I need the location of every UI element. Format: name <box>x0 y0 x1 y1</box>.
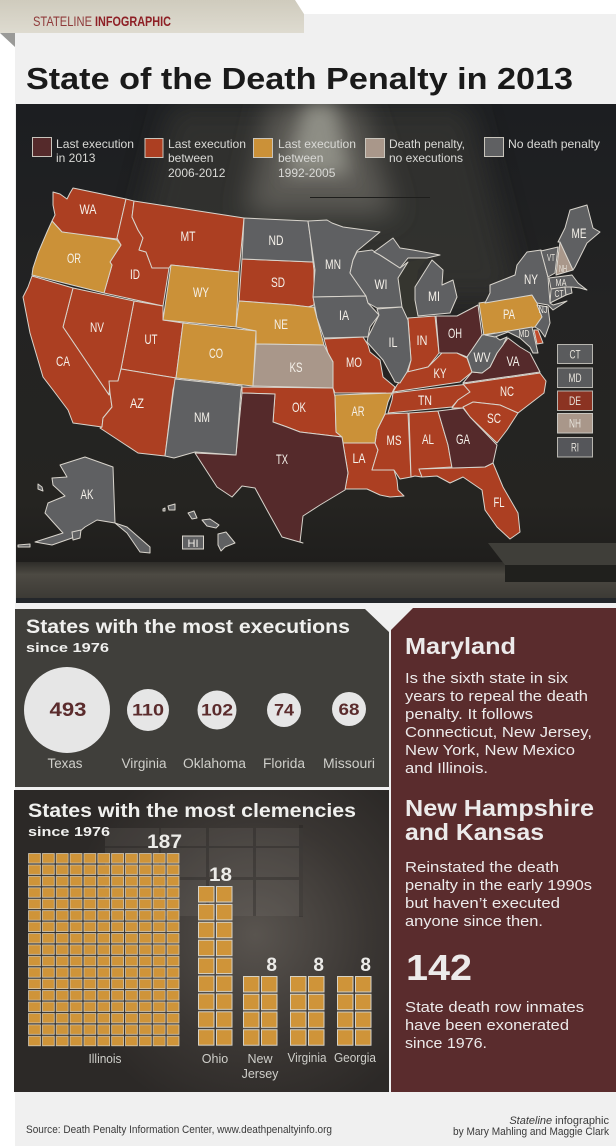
circle: Missouri 68: 68 <box>338 700 360 719</box>
text block: New Hampshire and Kansas: penalty in the early 1990s <box>405 877 592 894</box>
bar: Georgia 8 <box>334 955 376 1065</box>
heading: most clemencies: States with the most clemencies <box>28 801 356 822</box>
bar: Illinois 187: 187 <box>147 832 182 853</box>
credit <box>453 1115 609 1138</box>
label: Hawaii box: HI <box>188 538 198 550</box>
circle: Missouri 68 <box>323 692 375 771</box>
states: last execution between 2006-2012 <box>23 188 546 539</box>
legend: last execution between 1992-2005: Last execution <box>278 137 356 151</box>
circle: Florida 74 <box>263 693 305 771</box>
heading: most executions <box>26 617 350 655</box>
circle: Virginia 110 <box>122 689 169 771</box>
state abbreviations: NM <box>194 409 210 425</box>
panel: states with the most clemencies <box>14 790 389 1092</box>
key: MD: MD <box>568 373 582 385</box>
legend: no death penalty: No death penalty <box>508 137 600 151</box>
text block: Maryland <box>405 633 592 777</box>
state abbreviations: AL <box>422 431 434 447</box>
banner: Stateline Infographic: STATELINE <box>33 13 92 29</box>
text block: Maryland: New York, New Mexico <box>405 742 575 759</box>
state abbreviations: IN <box>416 332 428 348</box>
source note: Source: Death Penalty Information Center, www.deathpenaltyinfo.org <box>26 1124 332 1136</box>
bar: Ohio 18 <box>198 865 233 1066</box>
state abbreviations: ND <box>268 232 284 248</box>
state abbreviations: OR <box>67 250 81 266</box>
state abbreviations: NY <box>524 271 538 287</box>
legend: last execution between 2006-2012: between <box>168 151 213 165</box>
state abbreviations: WV <box>474 349 491 365</box>
credit: Stateline infographic <box>509 1115 609 1127</box>
text block: Maryland: and Illinois. <box>405 760 488 777</box>
legend: death penalty, no executions <box>366 137 465 165</box>
legend: last execution between 2006-2012 <box>145 137 246 180</box>
legend: no death penalty <box>484 137 600 156</box>
state abbreviations: KS <box>290 359 302 375</box>
state abbreviations: MN <box>325 256 341 272</box>
legend: last execution in 2013: in 2013 <box>56 151 96 165</box>
state abbreviations: MO <box>346 354 362 370</box>
state abbreviations: OK <box>292 399 306 415</box>
state abbreviations: KY <box>434 365 447 381</box>
state abbreviations: SD <box>271 274 285 290</box>
small state abbreviations: VT <box>547 253 555 264</box>
circle: Florida 74: Florida <box>263 756 305 771</box>
banner: Stateline Infographic: INFOGRAPHIC <box>95 13 171 29</box>
heading: most clemencies <box>28 801 356 839</box>
state abbreviations: VA <box>506 353 520 369</box>
heading: most clemencies: since 1976 <box>28 824 110 839</box>
small state abbreviations: MD <box>518 329 530 340</box>
state abbreviations: CA <box>56 353 70 369</box>
text block: New Hampshire and Kansas: New Hampshire <box>405 795 594 821</box>
text block: 142 exonerated: since 1976. <box>405 1035 487 1052</box>
panel: Maryland, New Hampshire and Kansas, exonerations <box>391 608 616 1092</box>
bar: Virginia 8: 8 <box>313 955 324 976</box>
state abbreviations: FL <box>494 494 505 510</box>
map legend <box>32 137 600 180</box>
label: Hawaii box <box>182 536 204 550</box>
bar: Ohio 18: Ohio <box>202 1052 228 1066</box>
panel: states with the most executions <box>15 609 389 787</box>
panel: map background <box>16 104 616 603</box>
state abbreviations <box>56 201 586 510</box>
key: RI: RI <box>571 442 579 454</box>
state abbreviations: CO <box>209 345 223 361</box>
legend: last execution between 1992-2005 <box>254 137 356 180</box>
small state abbreviations <box>518 253 567 340</box>
circle: Missouri 68: Missouri <box>323 756 375 771</box>
states: death penalty, no executions <box>253 242 573 388</box>
bar: New Jersey 8: New <box>247 1052 273 1066</box>
bar: New Jersey 8: Jersey <box>242 1067 279 1081</box>
text block: Maryland: penalty. It follows <box>405 706 533 723</box>
state abbreviations: TX <box>276 451 288 467</box>
circle: Texas 493 <box>24 667 110 771</box>
legend: last execution between 1992-2005: 1992-2005 <box>278 166 336 180</box>
state abbreviations: AK <box>80 486 94 502</box>
map: United States states by status <box>18 188 600 553</box>
state abbreviations: UT <box>144 331 158 347</box>
bar: New Jersey 8 <box>242 955 279 1081</box>
circle: Virginia 110: Virginia <box>122 756 167 771</box>
state abbreviations: MI <box>428 288 440 304</box>
text block: New Hampshire and Kansas: and Kansas <box>405 819 544 845</box>
heading: most executions: since 1976 <box>26 640 109 655</box>
legend: last execution between 1992-2005: between <box>278 151 323 165</box>
bar: Ohio 18: 18 <box>209 865 232 886</box>
circle: Oklahoma 102 <box>183 690 247 771</box>
bar: Georgia 8: 8 <box>360 955 371 976</box>
text block: 142 exonerated: State death row inmates <box>405 999 584 1016</box>
circle: Oklahoma 102: Oklahoma <box>183 756 247 771</box>
bar: New Jersey 8: 8 <box>266 955 277 976</box>
circle: Florida 74: 74 <box>274 700 295 720</box>
state abbreviations: AR <box>352 403 364 419</box>
state abbreviations: IL <box>388 334 398 350</box>
text block: 142 exonerated <box>405 947 584 1052</box>
state abbreviations: MT <box>180 228 196 244</box>
key: NH: NH <box>569 418 581 430</box>
small state abbreviations: NJ <box>538 305 548 316</box>
bar: Virginia 8 <box>288 955 327 1065</box>
key: CT: CT <box>570 350 580 362</box>
state abbreviations: NE <box>274 316 288 332</box>
state abbreviations: ID <box>130 266 140 282</box>
state abbreviations: SC <box>487 410 501 426</box>
state abbreviations: LA <box>352 450 366 466</box>
small state abbreviations: CT <box>554 289 564 300</box>
state abbreviations: OH <box>448 325 462 341</box>
legend: last execution between 2006-2012: 2006-2012 <box>168 166 226 180</box>
circle: Virginia 110: 110 <box>132 700 164 720</box>
text block: 142 exonerated: have been exonerated <box>405 1017 569 1034</box>
legend: death penalty, no executions: Death penalty, <box>389 137 465 151</box>
state abbreviations: AZ <box>130 395 144 411</box>
text block: New Hampshire and Kansas: but haven’t executed <box>405 895 560 912</box>
state abbreviations: ME <box>572 225 586 241</box>
legend: last execution in 2013 <box>32 137 134 165</box>
banner: Stateline Infographic <box>0 0 304 47</box>
legend: death penalty, no executions: no executions <box>389 151 463 165</box>
text block: New Hampshire and Kansas: anyone since then. <box>405 913 543 930</box>
states: last execution between 1992-2005 <box>32 221 542 443</box>
state abbreviations: MS <box>386 432 402 448</box>
state abbreviations: NC <box>500 383 514 399</box>
title: State of the Death Penalty in 2013 <box>26 61 573 96</box>
legend: last execution in 2013: Last execution <box>56 137 134 151</box>
state abbreviations: TN <box>418 392 432 408</box>
heading: most executions: States with the most executions <box>26 617 350 638</box>
circle: Oklahoma 102: 102 <box>201 700 233 720</box>
small state abbreviations: NH <box>559 264 567 275</box>
text block: 142 exonerated: 142 <box>406 947 472 988</box>
text block: Maryland: Connecticut, New Jersey, <box>405 724 592 741</box>
bar: Georgia 8: Georgia <box>334 1051 376 1065</box>
state abbreviations: WY <box>193 284 209 300</box>
text block: New Hampshire and Kansas: Reinstated the death <box>405 859 559 876</box>
state abbreviations: PA <box>503 306 515 322</box>
state abbreviations: WA <box>80 201 97 217</box>
text block: Maryland: Is the sixth state in six <box>405 670 569 687</box>
bar: Illinois 187 <box>28 832 182 1066</box>
legend: last execution between 2006-2012: Last execution <box>168 137 246 151</box>
text block: Maryland: Maryland <box>405 633 516 659</box>
small state abbreviations: MA <box>556 278 567 289</box>
state abbreviations: NV <box>90 319 104 335</box>
states: last execution in 2013 <box>195 305 540 543</box>
text block: New Hampshire and Kansas <box>405 795 594 930</box>
states: no death penalty <box>18 205 600 553</box>
key: DE: DE <box>569 396 581 408</box>
text block: Maryland: years to repeal the death <box>405 688 588 705</box>
state abbreviations: WI <box>374 276 388 292</box>
state abbreviations: IA <box>339 307 349 323</box>
bar: Illinois 187: Illinois <box>88 1052 122 1066</box>
circle: Texas 493: Texas <box>48 756 83 771</box>
small-state key boxes <box>558 344 592 457</box>
bar: Virginia 8: Virginia <box>288 1051 327 1065</box>
state abbreviations: GA <box>456 431 470 447</box>
circle: Texas 493: 493 <box>50 700 86 721</box>
